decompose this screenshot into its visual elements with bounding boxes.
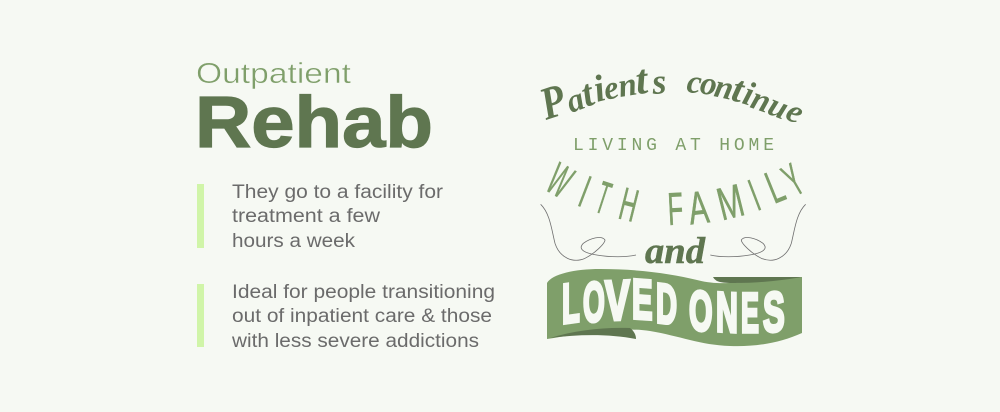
curved text: WITH FAMILY: I xyxy=(742,170,767,220)
curved text: WITH FAMILY xyxy=(538,153,812,235)
description text: hours a week xyxy=(232,231,356,252)
curved text: WITH FAMILY: A xyxy=(686,182,712,235)
description text: They go to a facility for xyxy=(232,182,444,203)
arched script text: Patients continue: i xyxy=(739,75,759,114)
arched script text: Patients continue: e xyxy=(600,70,622,108)
description text: treatment a few xyxy=(232,206,380,227)
curved text: WITH FAMILY: M xyxy=(712,175,749,231)
ribbon fold: top right xyxy=(713,277,802,283)
ribbon fold: bottom left xyxy=(550,328,636,339)
ribbon text: LOVED ONES xyxy=(562,267,785,345)
curved text: WITH FAMILY: Y xyxy=(774,153,812,206)
ribbon body xyxy=(547,269,802,346)
arched script text: Patients continue: s xyxy=(650,61,668,102)
curved text: WITH FAMILY: H xyxy=(615,177,643,232)
arched script text: Patients continue: t xyxy=(728,68,750,112)
arched script text: Patients continue: e xyxy=(780,93,809,132)
curved text: WITH FAMILY: L xyxy=(758,160,791,213)
arched script text: Patients continue: P xyxy=(533,74,573,131)
arched script text: Patients continue: n xyxy=(746,81,775,121)
arched script text: Patients continue xyxy=(533,57,809,132)
description text xyxy=(232,182,444,252)
description text: out of inpatient care & those xyxy=(232,306,492,327)
description text: with less severe addictions xyxy=(231,331,479,352)
curved text: WITH FAMILY: I xyxy=(573,166,597,217)
ribbon text: LOVED ONES: N xyxy=(716,280,738,345)
curved text: WITH FAMILY: F xyxy=(666,182,684,235)
ribbon text: LOVED ONES: E xyxy=(632,267,653,332)
curved text: WITH FAMILY: W xyxy=(538,153,581,208)
arched script text: Patients continue: o xyxy=(698,65,720,103)
arched script text: Patients continue: n xyxy=(616,66,639,105)
typographic lockup xyxy=(533,57,812,346)
arched script text: Patients continue: t xyxy=(633,57,651,104)
ribbon text: LOVED ONES: E xyxy=(741,282,759,345)
arched script text: Patients continue: t xyxy=(576,72,600,116)
description text: Ideal for people transitioning xyxy=(232,282,495,303)
text block: facility treatment xyxy=(197,182,444,252)
right flourish xyxy=(710,204,806,260)
text: LIVING AT HOME: LIVING AT HOME xyxy=(573,136,774,156)
ribbon text: LOVED ONES: L xyxy=(562,272,580,336)
script word: and: and xyxy=(645,231,706,272)
ribbon text: LOVED ONES: O xyxy=(689,278,713,344)
heading: Outpatient Rehab xyxy=(195,58,433,163)
arched script text: Patients continue: u xyxy=(763,87,794,127)
description text xyxy=(231,282,495,352)
ribbon text: LOVED ONES: O xyxy=(583,271,605,335)
arched script text: Patients continue: c xyxy=(685,64,704,102)
curved text: WITH FAMILY: T xyxy=(590,172,616,225)
ribbon text: LOVED ONES: D xyxy=(656,273,677,337)
left flourish xyxy=(541,204,636,260)
arched script text: Patients continue: i xyxy=(589,67,610,111)
text block: ideal candidates xyxy=(197,282,495,352)
arched script text: Patients continue: a xyxy=(561,81,589,121)
heading line: Rehab: Rehab xyxy=(195,83,433,163)
arched script text: Patients continue: n xyxy=(711,69,737,108)
ribbon text: LOVED ONES: S xyxy=(763,280,785,344)
heading line: Outpatient: Outpatient xyxy=(196,58,351,90)
accent bar xyxy=(197,284,204,347)
accent bar xyxy=(197,184,204,248)
ribbon banner xyxy=(547,267,802,346)
ribbon text: LOVED ONES: V xyxy=(605,270,630,333)
